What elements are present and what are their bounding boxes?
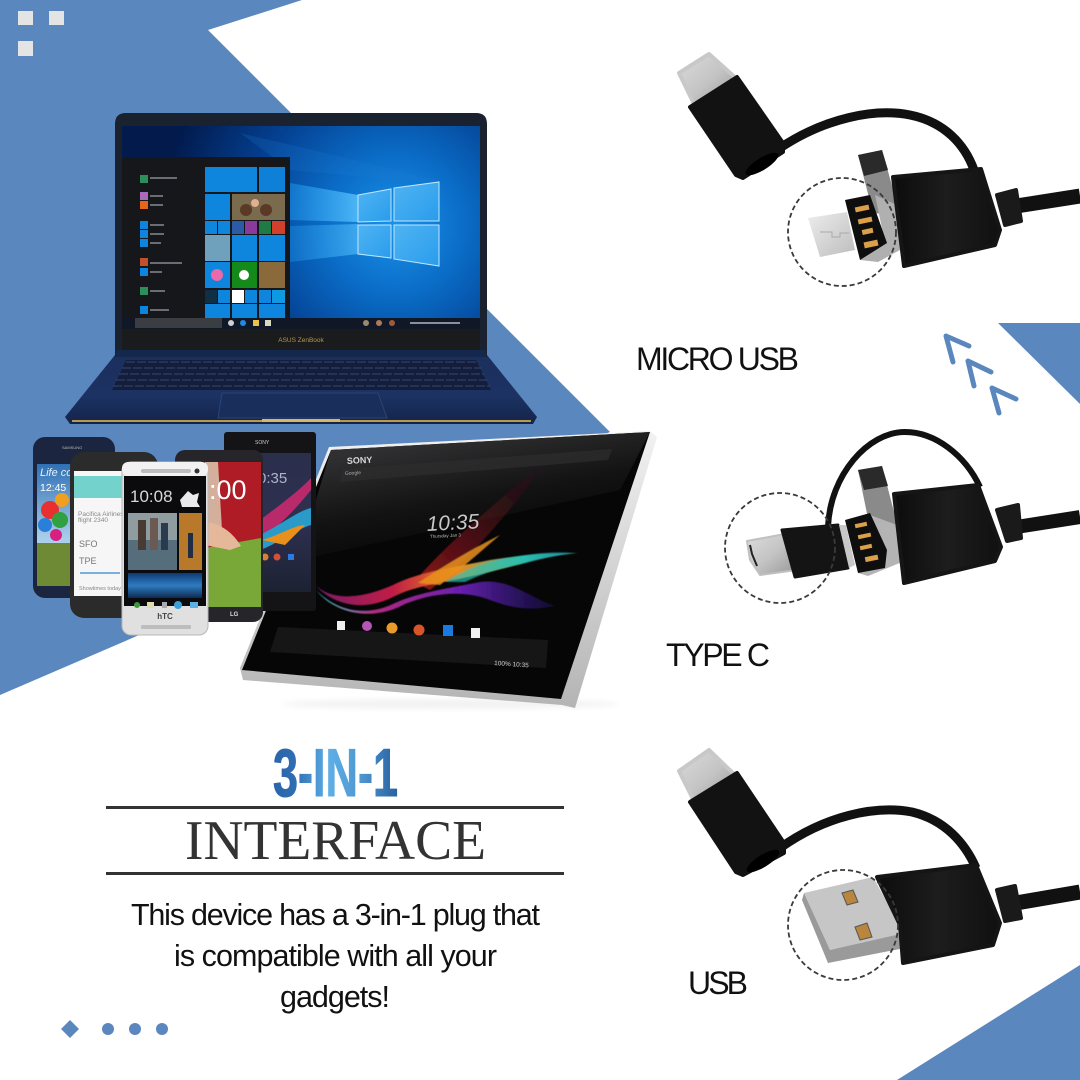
- micro tip: [808, 212, 855, 257]
- phones: [33, 432, 316, 635]
- laptop lid: [115, 113, 487, 357]
- connecting cable: [780, 113, 974, 170]
- adapter body: [782, 525, 848, 577]
- phone: LG: :00: [209, 475, 247, 505]
- laptop wallpaper: [122, 126, 480, 318]
- rule top: [106, 806, 564, 809]
- phone: LG: [175, 450, 263, 622]
- phone: HTC: [122, 462, 208, 635]
- pin plate with gold contacts: [845, 513, 887, 573]
- top-right blue triangle: [998, 323, 1080, 404]
- metal hinge: [858, 466, 898, 528]
- plug housing: [893, 169, 1000, 266]
- tablet wave graphic: [316, 466, 578, 614]
- adapter mouth: [744, 846, 782, 876]
- main cable and strain relief: [1010, 892, 1080, 904]
- phone: Samsung: [33, 437, 115, 598]
- bottom-right blue triangle: [897, 965, 1080, 1080]
- USB label: USB: [688, 965, 748, 1001]
- phone: Nexus: Pacifica Airlines: [78, 511, 124, 518]
- tablet text: Thursday Jan 3: [430, 532, 462, 539]
- tablet text: 100% 10:35: [494, 660, 529, 669]
- cable: USB: [679, 750, 1080, 980]
- blue background shape: [0, 0, 610, 695]
- main cable and strain relief: [1010, 517, 1080, 528]
- dashed circle: [788, 178, 896, 286]
- dashed circle: [725, 493, 835, 603]
- main cable and strain relief: [1010, 196, 1080, 207]
- arrows: [946, 336, 1016, 413]
- type-C adapter silver tip: [679, 54, 738, 108]
- tablet screen: [242, 432, 650, 699]
- taskbar: [122, 318, 480, 329]
- type C label: TYPE C: [666, 637, 770, 673]
- type-C adapter silver tip: [679, 750, 738, 805]
- tablet text: 10:35: [426, 510, 480, 536]
- pin plate with gold contacts: [845, 195, 887, 260]
- type-C tip: [747, 534, 797, 575]
- adapter body: [690, 77, 783, 178]
- phone: Sony: SONY: [255, 440, 270, 446]
- adapter body: [690, 773, 784, 875]
- phone: Nexus: SFO: [79, 539, 98, 549]
- cable: type C: [725, 432, 1080, 603]
- plug housing: [877, 865, 1000, 963]
- laptop: [65, 113, 537, 424]
- phone: Nexus: flight 2340: [78, 517, 108, 524]
- dashed circle: [788, 870, 898, 980]
- laptop brand: ASUS ZenBook: [278, 337, 325, 344]
- phone: Nexus: Showtimes today: [79, 586, 121, 592]
- laptop chin: [122, 329, 480, 350]
- micro USB label: MICRO USB: [636, 341, 799, 377]
- tablet: [240, 431, 657, 708]
- rule bottom: [106, 872, 564, 875]
- phone: Nexus: [70, 452, 158, 618]
- phone: HTC: hTC: [157, 612, 173, 621]
- heading: INTERFACE: INTERFACE: [185, 810, 486, 872]
- tablet shadow: [280, 699, 620, 709]
- tablet text: Google: [345, 470, 361, 477]
- phone: LG: LG: [230, 612, 239, 618]
- phone: Samsung: Life co: [40, 467, 72, 479]
- start menu tiles: [205, 167, 285, 318]
- connecting cable: [780, 810, 976, 868]
- tablet app icons: [337, 621, 480, 638]
- USB-A metal plug: [802, 877, 905, 963]
- description text: [131, 898, 541, 1014]
- description text: is compatible with all your: [174, 939, 497, 973]
- description text: This device has a 3-in-1 plug that: [131, 898, 541, 932]
- adapter mouth: [743, 149, 781, 179]
- tablet text: [345, 455, 529, 669]
- pagination dots: [61, 1020, 168, 1038]
- phone: Nexus: TPE: [79, 556, 97, 566]
- laptop base: [65, 355, 537, 424]
- plug housing: [894, 485, 1001, 583]
- phone: Sony: 0:35: [258, 470, 287, 487]
- phone: HTC: 10:08: [130, 487, 173, 506]
- start menu: [122, 157, 290, 318]
- description text: gadgets!: [280, 980, 390, 1014]
- cable: micro USB: [679, 54, 1080, 286]
- metal hinge: [858, 150, 898, 215]
- phone: Samsung: SAMSUNG: [62, 445, 82, 450]
- phone: Samsung: 12:45: [40, 482, 66, 494]
- tablet text: SONY: [347, 455, 373, 466]
- phone: Sony: [224, 432, 316, 611]
- title: 3-IN-1: 3-IN-1: [273, 735, 398, 811]
- decorative squares: [18, 11, 64, 56]
- connecting cable loop: [828, 432, 980, 527]
